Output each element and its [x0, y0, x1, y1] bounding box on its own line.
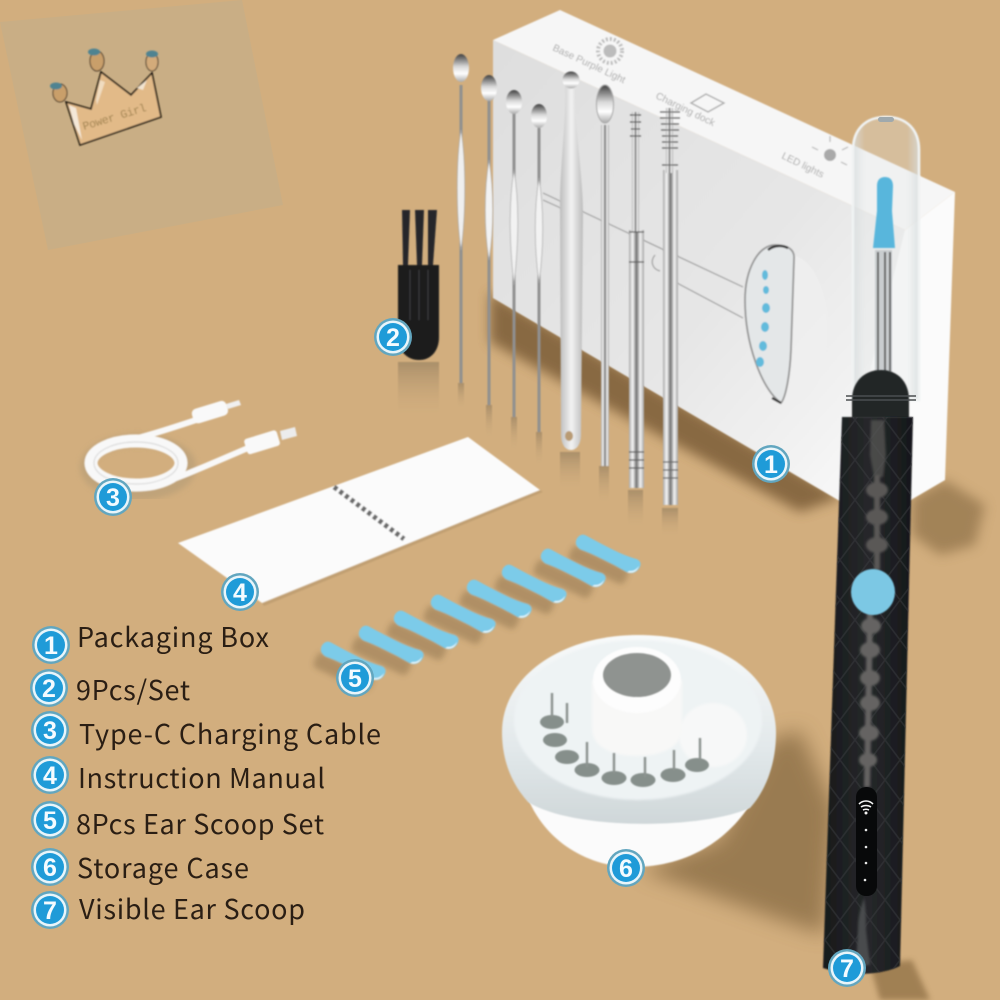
box window with scoops	[745, 245, 828, 405]
box end face	[838, 192, 955, 518]
lid inner	[514, 640, 762, 800]
callout badge 4	[221, 573, 259, 611]
box top label: LED lights	[780, 136, 848, 181]
cap top hinge	[878, 117, 894, 122]
legend item 1	[32, 616, 270, 664]
ear scoop strips	[312, 532, 642, 693]
crown logo	[50, 48, 161, 145]
case top ring	[593, 647, 681, 713]
callout badge 7: 7	[840, 955, 854, 983]
blue button	[851, 569, 895, 615]
charging cable	[86, 400, 297, 494]
callout badge 4: 4	[233, 579, 247, 607]
wifi display	[856, 787, 877, 896]
handle lower highlight	[856, 898, 870, 965]
case centre column	[592, 680, 682, 756]
callout badge 1: 1	[764, 451, 778, 479]
callout badge 6	[607, 849, 645, 887]
case inner lobes	[679, 703, 747, 767]
pick 4	[531, 104, 547, 432]
case tool slots	[540, 693, 709, 787]
handle lattice texture	[823, 417, 913, 974]
spoon tool	[596, 85, 614, 466]
callout badge 6: 6	[619, 855, 633, 883]
packaging box	[493, 10, 955, 518]
bristle brush	[398, 210, 439, 420]
legend item 1: 1	[44, 632, 58, 660]
legend item 3: 3	[43, 717, 57, 745]
instruction manual	[178, 437, 543, 606]
ear pick set	[453, 54, 680, 538]
legend item 7: Visible Ear Scoop	[79, 888, 305, 927]
legend item 3: Type-C Charging Cable	[79, 713, 381, 752]
legend item 2: 2	[42, 675, 56, 703]
legend item 6: Storage Case	[77, 847, 249, 886]
handle bead chain lower	[859, 612, 881, 787]
legend	[30, 616, 381, 929]
case shadow	[640, 730, 835, 935]
coil tool	[629, 112, 644, 488]
pick 2	[481, 75, 497, 405]
callout badge 3: 3	[106, 484, 120, 512]
device handle	[823, 417, 913, 974]
legend item 2: 9Pcs/Set	[76, 669, 190, 708]
legend item 5: 8Pcs Ear Scoop Set	[76, 803, 324, 842]
flat paddle tool	[560, 72, 583, 450]
shadow right of box	[912, 480, 985, 555]
visible ear scoop device	[823, 117, 930, 1000]
callout badge 2	[374, 318, 412, 356]
box top label: LED lights: LED lights	[780, 151, 825, 181]
case lid	[502, 635, 776, 824]
crown logo: Power Girl	[81, 102, 148, 134]
callout badge 5	[336, 659, 374, 697]
spiral tool	[660, 108, 680, 505]
callout badge 5: 5	[348, 665, 362, 693]
pick 1	[453, 54, 469, 383]
callout badge 1	[752, 445, 790, 483]
callout badge 3	[94, 478, 132, 516]
device shadow	[870, 960, 930, 1000]
box top label: charging dock: Charging dock	[654, 91, 717, 129]
case base	[525, 790, 756, 867]
callout badge 2: 2	[386, 324, 400, 352]
pick 3	[506, 90, 522, 417]
transparent cap	[853, 117, 919, 400]
dome ring	[846, 396, 916, 400]
box shadow	[490, 292, 842, 512]
case hole centre	[603, 653, 671, 697]
legend item 7: 7	[43, 897, 57, 925]
metal stem	[875, 250, 892, 375]
box line art	[543, 193, 743, 318]
box front face	[493, 40, 905, 510]
legend item 6: 6	[43, 854, 57, 882]
legend item 5: 5	[43, 807, 57, 835]
box top label: base light: Base Purple Light	[551, 43, 627, 86]
legend item 4: Instruction Manual	[78, 757, 325, 796]
storage case	[502, 635, 835, 935]
box top face	[493, 10, 955, 230]
watermark panel	[0, 0, 283, 250]
reflections	[458, 383, 678, 538]
device dome	[852, 370, 909, 418]
legend item 1: Packaging Box	[77, 616, 270, 655]
blue scoop tip	[873, 177, 895, 248]
handle bead chain upper	[866, 420, 888, 570]
callout badge 7	[828, 949, 866, 987]
legend item 4: 4	[43, 762, 57, 790]
